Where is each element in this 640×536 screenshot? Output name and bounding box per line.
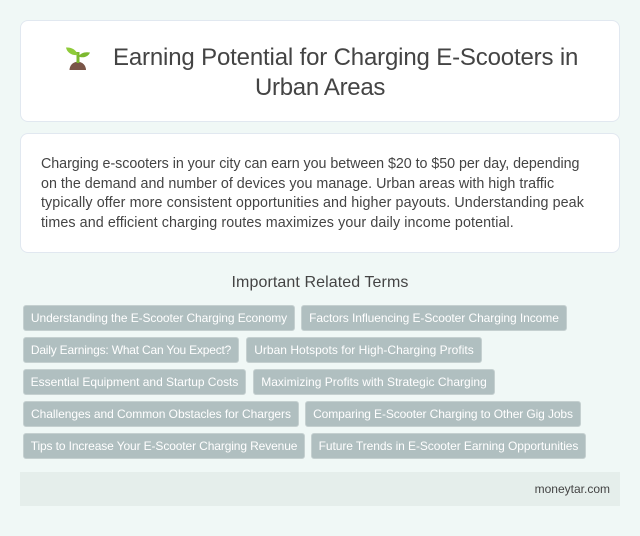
heading: related terms: Important Related Terms xyxy=(232,274,408,291)
tag list: Factors Influencing E-Scooter Charging Income xyxy=(309,311,559,325)
tag list: Understanding the E-Scooter Charging Economy xyxy=(31,311,287,325)
title xyxy=(113,44,578,101)
panel: title card xyxy=(20,20,620,122)
tag list: Daily Earnings: What Can You Expect? xyxy=(31,343,231,357)
paragraph text: on the demand and number of devices you manage. Urban areas with high traffic xyxy=(41,176,554,192)
paragraph text xyxy=(41,156,584,231)
tag list: Challenges and Common Obstacles for Chargers xyxy=(31,407,291,421)
paragraph text: Charging e-scooters in your city can earn you between $20 to $50 per day, depending xyxy=(41,156,579,172)
footer bar xyxy=(20,472,620,506)
title: Earning Potential for Charging E-Scooters in xyxy=(113,44,578,71)
tag list: Urban Hotspots for High-Charging Profits xyxy=(254,343,474,357)
title: Urban Areas xyxy=(255,74,385,101)
paragraph text: times and efficient charging routes maximizes your daily income potential. xyxy=(41,215,514,231)
tag list: Tips to Increase Your E-Scooter Charging Revenue xyxy=(31,439,297,453)
footer source: moneytar.com xyxy=(535,482,610,496)
tag list: Future Trends in E-Scooter Earning Opportunities xyxy=(319,439,578,453)
tag list: Essential Equipment and Startup Costs xyxy=(31,375,238,389)
tag list: Comparing E-Scooter Charging to Other Gig Jobs xyxy=(313,407,573,421)
tag list: Maximizing Profits with Strategic Charging xyxy=(261,375,487,389)
icon: seedling xyxy=(66,48,90,70)
panel: intro paragraph xyxy=(20,133,620,253)
paragraph text: typically offer more consistent opportunities and higher payouts. Understanding peak xyxy=(41,195,584,211)
tag list xyxy=(23,305,586,459)
